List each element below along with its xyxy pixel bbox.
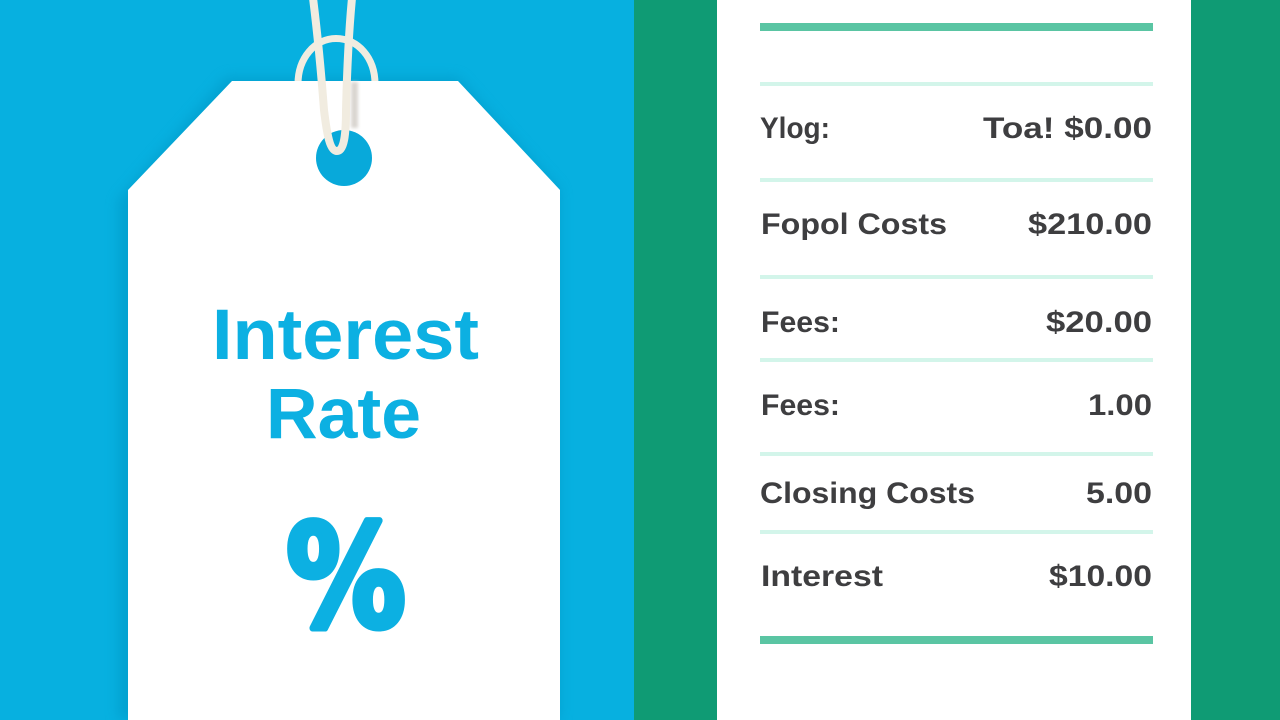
string loop behind tag [298,38,375,84]
row: closing costs [760,477,1152,510]
string strands [313,0,352,151]
panel: receipt [717,0,1191,720]
panel: blue background [0,0,634,720]
divider [760,178,1153,182]
row: interest [761,560,1152,593]
row: fees: $20.00 [1046,306,1152,339]
tag hole [316,130,372,186]
row: Ylog: Ylog: [760,112,830,145]
row: interest: $10.00 [1049,560,1152,593]
percent symbol: % [286,494,406,660]
row: Ylog [760,112,1152,145]
row: fees [761,306,1152,339]
divider [760,82,1153,86]
row: fees second: 1.00 [1088,389,1152,422]
row: food costs [761,208,1152,241]
row: Ylog: Toa! $0.00 [983,112,1152,145]
row: fees second: Fees: [761,389,840,422]
divider [760,275,1153,279]
row: interest: Interest [761,560,883,593]
top rule [760,23,1153,31]
row: food costs: $210.00 [1028,208,1152,241]
tag body [128,81,560,720]
tag heading [212,296,479,454]
row: food costs: Fopol Costs [761,208,947,241]
tag heading: Interest [212,296,479,375]
row: fees: Fees: [761,306,840,339]
divider [760,452,1153,456]
panel: green background [634,0,1280,720]
price tag [118,0,560,720]
string shadow [351,82,358,128]
row: closing costs: Closing Costs [760,477,975,510]
bottom rule [760,636,1153,644]
tag heading: Rate [266,375,421,454]
row: fees second [761,389,1152,422]
divider [760,358,1153,362]
row: closing costs: 5.00 [1086,477,1152,510]
divider [760,530,1153,534]
